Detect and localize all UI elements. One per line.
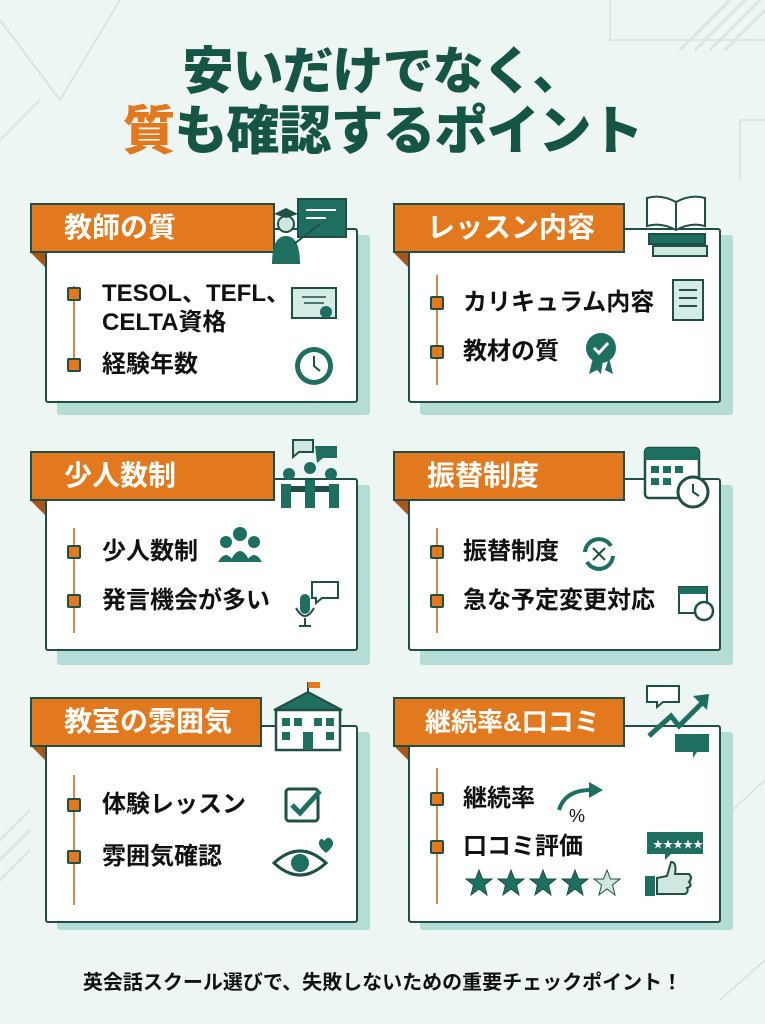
panel: small class (30, 439, 370, 665)
icon: eye heart (272, 838, 334, 877)
text: 少人数制 (102, 538, 198, 565)
heading (393, 451, 625, 501)
heading: 教室の雰囲気 (64, 706, 232, 737)
text: TESOL、TEFL、 (102, 280, 290, 307)
icon: clock (295, 347, 333, 385)
icon: percent arrow (557, 782, 603, 826)
title (122, 43, 642, 161)
icon: school (274, 682, 342, 752)
text: 体験レッスン (102, 791, 246, 818)
panel: makeup lessons: 急な予定変更対応 (463, 587, 655, 614)
icon: calendar small (678, 586, 714, 622)
heading (393, 697, 625, 747)
panel: makeup lessons (393, 446, 733, 665)
icon: trend arrow (646, 685, 709, 758)
heading: 振替制度 (427, 460, 539, 491)
panel: retention & reviews (393, 685, 733, 930)
text: 振替制度 (463, 538, 559, 565)
panel: retention & reviews: 口コミ評価 (463, 833, 583, 860)
icon: award (586, 333, 616, 374)
heading (30, 203, 275, 253)
icon: group (218, 527, 262, 562)
heading: 教師の質 (64, 212, 176, 243)
panel: small class: 発言機会が多い (102, 587, 270, 614)
text: 継続率 (463, 785, 535, 812)
heading (30, 697, 262, 747)
icon: certificate (291, 287, 337, 319)
text (102, 280, 290, 336)
icon: checkbox (284, 788, 322, 822)
icon: stars (465, 868, 622, 896)
icon: thumbs up review: ★★★★★ (653, 840, 703, 851)
icon: thumbs up review (645, 832, 703, 896)
icon: calendar clock (644, 446, 710, 508)
footer text: 英会話スクール選びで、失敗しないための重要チェックポイント！ (83, 972, 682, 994)
icon: percent arrow: % (569, 806, 585, 826)
text: CELTA資格 (102, 309, 226, 336)
panel: atmosphere: 雰囲気確認 (102, 843, 222, 870)
title: 安いだけでなく、 (182, 43, 582, 100)
panel: lesson content (393, 196, 733, 415)
heading: レッスン内容 (427, 212, 595, 243)
heading: 少人数制 (64, 460, 176, 491)
heading (393, 203, 625, 253)
icon: meeting (281, 439, 339, 508)
panel: teacher quality (30, 198, 370, 415)
text: カリキュラム内容 (463, 289, 654, 316)
heading: 継続率&口コミ (425, 707, 600, 737)
icon: books (646, 196, 708, 257)
title: 質も確認するポイント (122, 102, 642, 161)
icon: document (672, 279, 704, 321)
panel: atmosphere (30, 682, 370, 930)
icon: mic (295, 581, 339, 627)
panel: teacher quality: 経験年数 (102, 351, 198, 378)
panel: lesson content: 教材の質 (463, 338, 559, 365)
icon: teacher (272, 198, 347, 264)
icon: swap (583, 537, 615, 571)
heading (30, 451, 275, 501)
